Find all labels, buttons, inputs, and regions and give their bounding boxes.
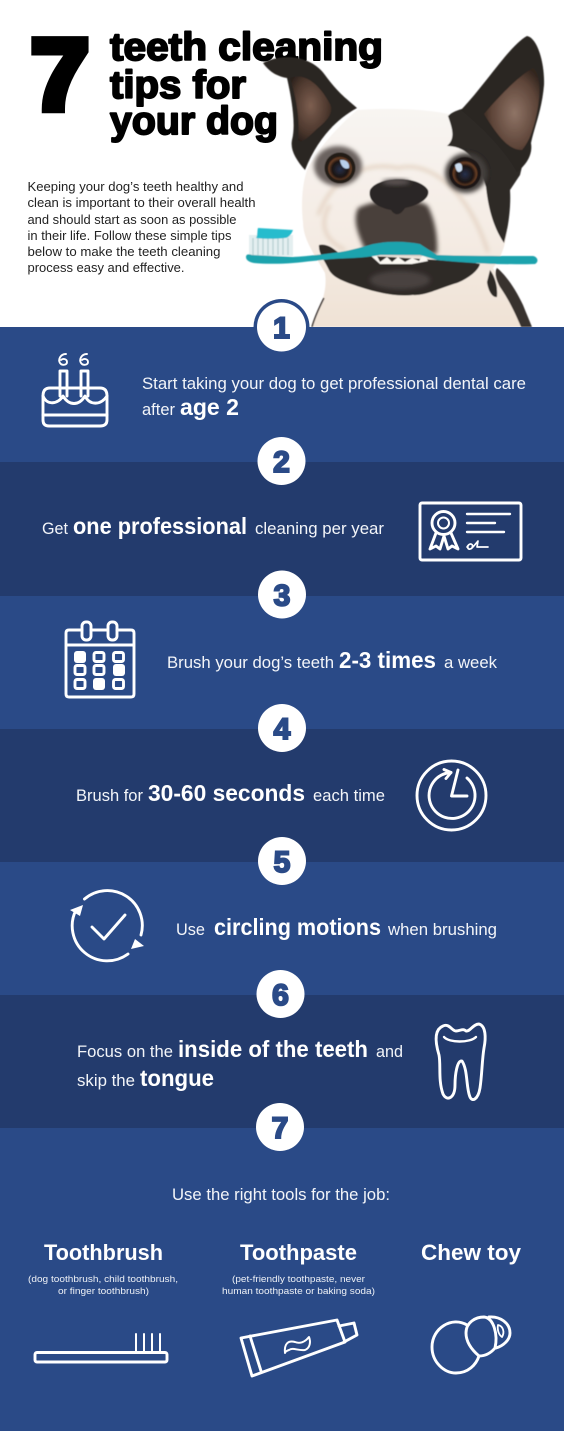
- icon: toothbrush: [35, 1334, 167, 1362]
- tip 1 text: age 2: [180, 394, 239, 420]
- panel: tip 1 band: [0, 327, 564, 462]
- number badge 3: 3: [274, 580, 290, 612]
- icon: chew toy: [432, 1317, 510, 1373]
- nose highlight: [382, 179, 410, 185]
- toothbrush note: or finger toothbrush): [58, 1286, 149, 1297]
- tip 5 text: [176, 914, 497, 940]
- number badge 2: 2: [273, 446, 290, 479]
- tip 5 text: when brushing: [387, 921, 497, 939]
- tip 2 text: [42, 513, 385, 539]
- panel: tip 2 band: [0, 462, 564, 596]
- icon: toothpaste tube: [241, 1320, 357, 1376]
- shoulder spot: [487, 270, 497, 297]
- tip 4 text: each time: [313, 787, 385, 805]
- number badge 7: 7: [272, 1112, 288, 1145]
- tip 6 text: skip the: [77, 1072, 135, 1090]
- tip 7 heading: Use the right tools for the job:: [172, 1186, 390, 1204]
- shoulder marking: [496, 268, 532, 327]
- tip 3 text: [167, 647, 498, 673]
- tip 2 text: cleaning per year: [255, 520, 385, 538]
- title text: tips for: [110, 64, 246, 107]
- tip 4 text: 30-60 seconds: [148, 780, 305, 806]
- number badge 6: [256, 970, 304, 1018]
- right eye patch: [445, 153, 487, 193]
- intro paragraph: below to make the teeth cleaning: [28, 244, 220, 259]
- tip 2 text: Get: [42, 520, 68, 538]
- tip 3 text: a week: [444, 654, 498, 672]
- tip 1 text: Start taking your dog to get professional dental care: [142, 375, 526, 393]
- number badge 1: [254, 299, 310, 355]
- muzzle: [356, 200, 437, 254]
- number badge 6: 6: [272, 979, 289, 1012]
- toothpaste heading: Toothpaste: [240, 1240, 357, 1265]
- tip 4 text: [76, 780, 385, 806]
- number badge 4: 4: [274, 713, 291, 746]
- right ear: [461, 36, 544, 172]
- tip 5 text: circling motions: [214, 914, 381, 940]
- tip 4 text: Brush for: [76, 787, 143, 805]
- big numeral 7: 7: [31, 19, 89, 131]
- number badge 5: 5: [274, 846, 290, 879]
- intro paragraph: Keeping your dog’s teeth healthy and: [28, 179, 244, 194]
- intro paragraph: process easy and effective.: [28, 260, 184, 275]
- panel: tip 3 band: [0, 596, 564, 729]
- panel: tip 5 band: [0, 862, 564, 995]
- tip 6 text: [77, 1036, 403, 1091]
- toothpaste note: (pet-friendly toothpaste, never: [232, 1274, 365, 1285]
- number badge 5: [258, 837, 306, 885]
- toothbrush: [246, 228, 537, 264]
- icon: calendar: [66, 622, 134, 697]
- number badge 7: [256, 1103, 304, 1151]
- title text: [110, 26, 383, 143]
- left ear: [263, 57, 357, 170]
- intro paragraph: and should start as soon as possible: [28, 212, 236, 227]
- neck line: [312, 298, 324, 327]
- toothpaste note: [222, 1274, 375, 1297]
- right eye: [449, 157, 481, 189]
- bristles: [249, 235, 293, 256]
- tip 3 text: 2-3 times: [339, 647, 436, 673]
- icon: tooth: [436, 1024, 485, 1100]
- number badge 4: [258, 704, 306, 752]
- tip 6 text: inside of the teeth: [178, 1036, 368, 1062]
- teeth: [370, 253, 428, 264]
- intro paragraph: in their life. Follow these simple tips: [28, 228, 232, 243]
- number badge 3: [258, 570, 306, 618]
- column: chew toy: [421, 1240, 522, 1373]
- left eye: [324, 152, 356, 184]
- tip 1 text: after: [142, 401, 175, 419]
- tip 1 text: [142, 375, 526, 420]
- icon: circling arrows with check: [70, 891, 144, 961]
- icon: certificate: [420, 503, 521, 560]
- chin grey: [370, 271, 430, 289]
- bristle lines: [253, 238, 288, 255]
- tip 3 text: Brush your dog’s teeth: [167, 654, 334, 672]
- mouth and chin: [319, 245, 480, 295]
- dog photo illustration: [246, 36, 544, 327]
- intro paragraph: [28, 179, 256, 275]
- left eye patch: [314, 146, 362, 186]
- toothpaste note: human toothpaste or baking soda): [222, 1286, 375, 1297]
- right dark patch: [447, 108, 526, 243]
- face creases: [318, 166, 488, 252]
- column: toothpaste: [222, 1240, 375, 1376]
- title: [31, 19, 383, 143]
- panel: tip 4 band: [0, 729, 564, 862]
- dog body and head: [302, 109, 530, 327]
- title text: teeth cleaning: [110, 26, 383, 69]
- toothbrush note: (dog toothbrush, child toothbrush,: [28, 1274, 178, 1285]
- panel: tip 6 band: [0, 995, 564, 1128]
- handle: [246, 242, 537, 264]
- tip 6 text: Focus on the: [77, 1043, 173, 1061]
- panel: tip 7 band: [0, 1128, 564, 1431]
- number badge 2: [258, 437, 306, 485]
- icon: birthday cake: [43, 354, 107, 426]
- tip 2 text: one professional: [73, 513, 247, 539]
- tip 5 text: Use: [176, 921, 205, 939]
- icon: timer: [417, 761, 486, 830]
- toothbrush note: [28, 1274, 178, 1297]
- toothpaste: [256, 228, 293, 239]
- toothbrush heading: Toothbrush: [44, 1240, 163, 1265]
- chew toy heading: Chew toy: [421, 1240, 522, 1265]
- number badge 1: 1: [273, 312, 290, 345]
- intro paragraph: clean is important to their overall health: [28, 195, 256, 210]
- nose: [370, 179, 428, 214]
- column: toothbrush: [28, 1240, 178, 1362]
- tip 6 text: and: [376, 1043, 403, 1061]
- title text: your dog: [110, 100, 278, 143]
- tip 6 text: tongue: [140, 1065, 214, 1091]
